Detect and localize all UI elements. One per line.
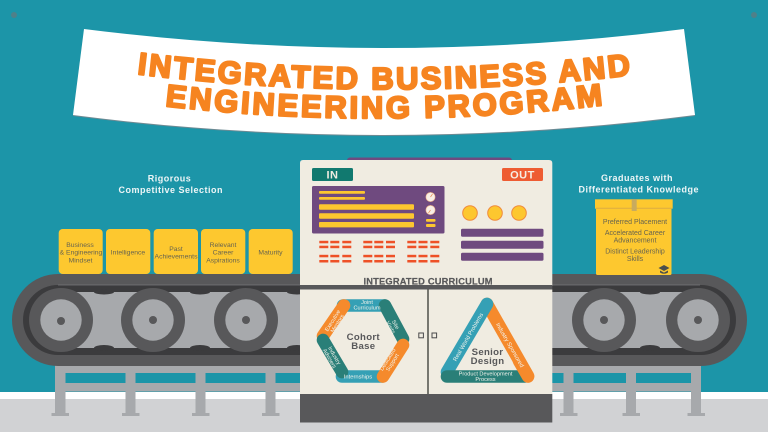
red indicator dashes bbox=[319, 241, 439, 262]
box: past achievements: Achievements bbox=[154, 254, 198, 261]
knob bbox=[426, 205, 435, 215]
dials bbox=[463, 206, 526, 220]
heading: graduates with differentiated knowledge: Graduates with bbox=[601, 173, 673, 183]
box: intelligence: Intelligence bbox=[111, 250, 145, 257]
hexagon labels: Advisers bbox=[321, 348, 337, 370]
conveyor belt bbox=[12, 274, 747, 366]
door handle bbox=[432, 333, 437, 338]
hexagon labels: Mentors bbox=[330, 314, 346, 334]
box: maturity bbox=[249, 229, 293, 274]
icon: graduation cap bbox=[658, 265, 670, 274]
triangle labels bbox=[453, 312, 524, 383]
senior design label: Senior bbox=[472, 347, 503, 358]
output bars bbox=[461, 229, 544, 261]
knob bbox=[426, 192, 435, 202]
badge: out: OUT bbox=[510, 170, 535, 182]
package outcomes text: Preferred Placement bbox=[603, 219, 667, 226]
heading: rigorous competitive selection: Rigorous bbox=[148, 174, 191, 184]
triangle labels: Process bbox=[475, 377, 496, 383]
package outcomes text: Skills bbox=[627, 256, 644, 263]
hexagon labels: Support bbox=[385, 353, 401, 373]
hexagon labels: Dedicated bbox=[379, 348, 398, 372]
heading: graduates with differentiated knowledge: Differentiated Knowledge bbox=[578, 185, 698, 195]
graduate package bbox=[595, 199, 673, 275]
box: relevant career aspirations: Career bbox=[213, 250, 234, 257]
box: past achievements bbox=[154, 229, 198, 274]
control screen bbox=[312, 186, 444, 234]
integrated curriculum label: INTEGRATED CURRICULUM bbox=[364, 276, 493, 286]
wheel bbox=[666, 288, 730, 352]
package outcomes text: Accelerated Career bbox=[605, 230, 666, 237]
badge: in bbox=[312, 168, 353, 182]
wheel bbox=[214, 288, 278, 352]
title text second line: ENGINEERING PROGRAM bbox=[166, 83, 602, 120]
badge: out bbox=[502, 168, 543, 182]
triangle labels: Industry Sponsored bbox=[494, 322, 524, 369]
box: business and engineering mindset bbox=[59, 229, 103, 274]
triangle labels: Real World Problems bbox=[453, 312, 485, 363]
selection boxes bbox=[59, 229, 293, 274]
hexagon labels: Industry bbox=[326, 346, 341, 366]
conveyor stand bbox=[52, 362, 705, 416]
box: relevant career aspirations: Relevant bbox=[210, 242, 237, 249]
wheel bbox=[29, 288, 93, 352]
title text: INTEGRATED BUSINESS AND bbox=[138, 52, 630, 90]
cohort base hexagon bbox=[321, 300, 403, 381]
hexagon labels bbox=[321, 300, 402, 381]
box: relevant career aspirations: Aspirations bbox=[206, 257, 240, 264]
senior design label: Design bbox=[471, 356, 504, 367]
package outcomes text: Advancement bbox=[614, 238, 656, 245]
badge: in: IN bbox=[326, 170, 338, 182]
door handle bbox=[419, 333, 423, 338]
hexagon labels: Visits bbox=[384, 321, 396, 335]
heading: rigorous competitive selection: Competitive Selection bbox=[118, 185, 222, 195]
hexagon labels: Curriculum bbox=[353, 306, 381, 312]
hexagon labels: Executive bbox=[324, 309, 342, 333]
box: intelligence bbox=[106, 229, 150, 274]
cohort base label: Base bbox=[351, 341, 375, 352]
box: past achievements: Past bbox=[169, 246, 183, 253]
box: relevant career aspirations bbox=[201, 229, 245, 274]
hexagon labels: Internships bbox=[344, 375, 372, 381]
hexagon labels: Site bbox=[390, 319, 400, 331]
package outcomes text: Distinct Leadership bbox=[605, 248, 665, 255]
senior design triangle bbox=[447, 304, 528, 383]
triangle labels: Product Development bbox=[459, 372, 513, 378]
machine bbox=[300, 158, 552, 422]
box: maturity: Maturity bbox=[258, 250, 283, 257]
title banner bbox=[73, 29, 695, 136]
wheel bbox=[121, 288, 185, 352]
hexagon labels: Joint bbox=[361, 300, 373, 306]
box: business and engineering mindset: & Engineering bbox=[60, 250, 103, 257]
box: business and engineering mindset: Business bbox=[66, 242, 94, 249]
wheel bbox=[572, 288, 636, 352]
box: business and engineering mindset: Mindset bbox=[69, 257, 93, 264]
cohort base label: Cohort bbox=[347, 332, 380, 343]
